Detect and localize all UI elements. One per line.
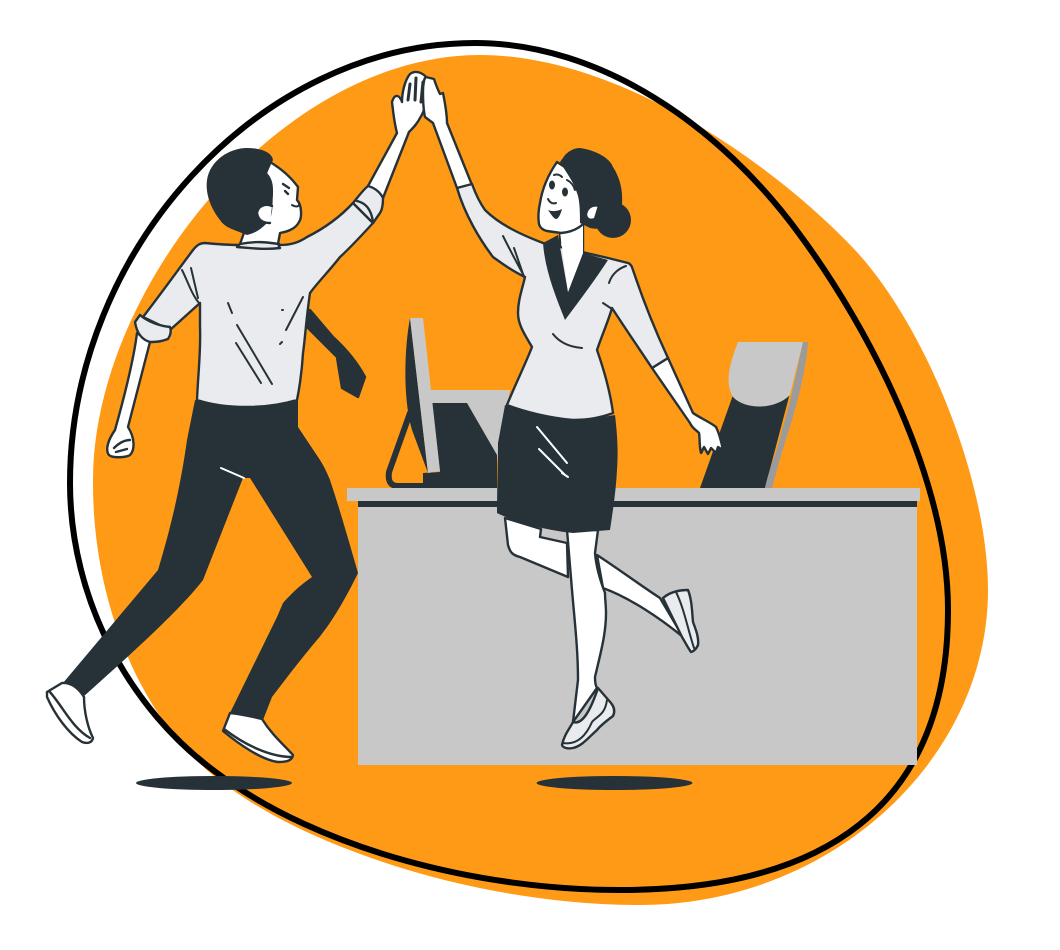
- floor shadow: man: [136, 776, 292, 790]
- blouse folds: [503, 236, 626, 348]
- left cuff: [135, 315, 171, 342]
- eyes: [549, 180, 568, 196]
- hair: [560, 148, 622, 229]
- skirt folds: [537, 427, 568, 477]
- trousers: [63, 400, 358, 720]
- back shoe: [47, 683, 93, 743]
- raised arm and hand: [423, 77, 472, 188]
- raised arm and hand: [368, 72, 430, 198]
- raised foot shoe: [663, 590, 698, 652]
- ear: [586, 205, 599, 220]
- orange blob background: [93, 55, 988, 905]
- face: [538, 162, 590, 233]
- neckline collar: [543, 235, 608, 320]
- collar: [237, 242, 280, 249]
- ear: [257, 205, 272, 223]
- mouth: [548, 209, 562, 219]
- neck and face: [240, 162, 301, 244]
- office chair: [700, 342, 808, 488]
- bent leg thigh: [505, 518, 568, 577]
- tie: [307, 310, 365, 397]
- shirt folds: [182, 268, 303, 384]
- standing foot shoe: [562, 688, 614, 748]
- bun: [595, 202, 631, 238]
- lower arm and hand: [652, 358, 723, 454]
- shirt: [143, 203, 373, 407]
- right cuff: [353, 186, 383, 223]
- skirt: [497, 405, 618, 533]
- woman: [423, 77, 723, 748]
- lower arm and fist: [107, 333, 150, 457]
- desk: [347, 488, 920, 765]
- neck: [560, 223, 583, 292]
- trouser highlight: [221, 468, 244, 478]
- eye: [283, 184, 289, 194]
- black outline blob: [70, 43, 948, 890]
- brows and nose: [548, 175, 575, 203]
- mouth: [292, 205, 299, 206]
- blouse: [457, 184, 668, 420]
- hair: [207, 148, 273, 235]
- standing leg: [567, 530, 606, 722]
- man: [47, 72, 430, 762]
- front shoe: [223, 713, 293, 762]
- bent leg calf: [597, 555, 683, 637]
- monitor: [389, 318, 510, 488]
- floor shadow: woman: [536, 776, 692, 790]
